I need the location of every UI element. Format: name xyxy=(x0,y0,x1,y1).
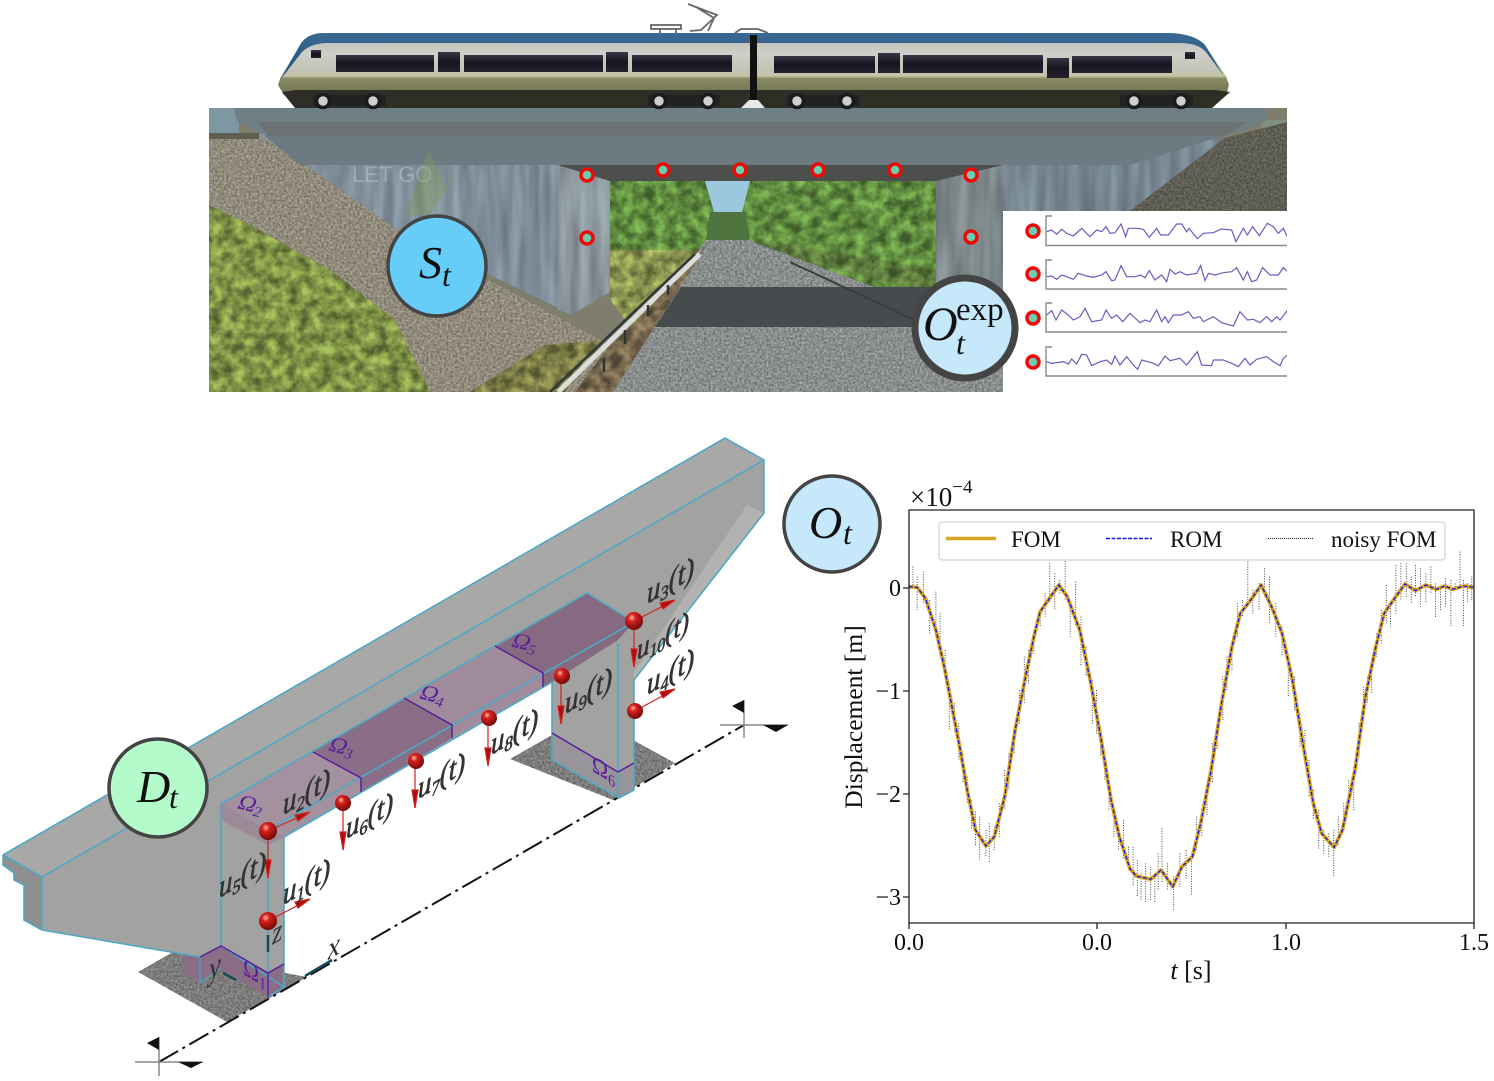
displacement labels: (t) xyxy=(665,605,689,651)
domain labels: 4 xyxy=(432,694,447,711)
y tick labels: −3 xyxy=(875,885,901,911)
badge: O_t exp: t xyxy=(956,325,966,361)
coordinate axes: x xyxy=(327,925,340,967)
FOM curve xyxy=(909,584,1474,887)
x tick labels: 1.0 xyxy=(1271,930,1301,956)
displacement labels: (t) xyxy=(513,700,538,749)
measured signals inset xyxy=(1003,211,1288,392)
legend xyxy=(939,522,1445,560)
displacement labels: (t) xyxy=(587,659,612,708)
domain labels: Ω xyxy=(243,953,259,989)
domain labels xyxy=(233,628,615,995)
displacement labels: u xyxy=(491,719,504,762)
displacement labels: u xyxy=(565,678,578,721)
section marker near xyxy=(135,1037,203,1076)
train bogies xyxy=(313,94,1193,108)
axis scale factor: ×10 xyxy=(910,482,952,512)
displacement labels: 8 xyxy=(504,731,513,757)
finite element bridge model xyxy=(3,438,788,1076)
displacement labels: u xyxy=(283,869,296,912)
y tick labels: −2 xyxy=(875,782,901,808)
pantograph xyxy=(651,4,768,34)
displacement labels: (t) xyxy=(440,744,465,793)
displacement arrows xyxy=(265,600,675,921)
end face shading xyxy=(3,855,42,930)
coordinate axes xyxy=(206,911,340,988)
displacement labels: u xyxy=(637,628,650,667)
line chart: displacement vs time xyxy=(839,477,1489,985)
signal axes xyxy=(1046,216,1287,376)
centre line xyxy=(135,700,788,1076)
badge: S_t: t xyxy=(442,257,452,293)
y tick labels xyxy=(875,576,901,911)
coordinate axes: y xyxy=(206,945,221,988)
y tick labels: −1 xyxy=(875,679,901,705)
domain labels: 3 xyxy=(341,746,356,763)
displacement labels: (t) xyxy=(368,784,393,833)
domain labels: 5 xyxy=(524,642,539,659)
train windows xyxy=(311,50,1195,78)
displacement labels: u xyxy=(219,862,232,905)
concrete body xyxy=(3,438,764,997)
train gangway xyxy=(750,35,757,100)
y axis title: Displacement [m] xyxy=(839,625,868,809)
signal traces xyxy=(1047,223,1288,369)
domain labels: Ω xyxy=(508,628,536,655)
displacement labels: (t) xyxy=(669,549,694,598)
displacement labels: u xyxy=(647,568,660,611)
sensors on bridge and inset xyxy=(581,164,1039,368)
sensor node spheres xyxy=(259,612,643,930)
legend: FOM xyxy=(1011,527,1061,552)
pier footing faces xyxy=(221,733,634,997)
displacement labels: 9 xyxy=(578,690,587,716)
train body xyxy=(278,33,1229,100)
displacement labels: u xyxy=(283,779,296,822)
domain labels: 2 xyxy=(250,804,265,821)
displacement labels: (t) xyxy=(669,640,694,689)
displacement labels: 2 xyxy=(296,791,305,817)
legend: ROM xyxy=(1170,527,1222,552)
purple girder subdomains xyxy=(221,593,634,845)
displacement labels: 7 xyxy=(431,775,441,801)
x tick labels: 1.5 xyxy=(1459,930,1489,956)
domain labels: 6 xyxy=(608,769,615,792)
displacement labels: u xyxy=(647,659,660,702)
noisy FOM trace xyxy=(909,552,1474,910)
domain labels: 1 xyxy=(259,972,266,995)
x tick labels: 0.0 xyxy=(894,930,924,956)
displacement labels: 4 xyxy=(660,671,669,697)
x axis title: t [s] xyxy=(1170,956,1212,985)
displacement labels: 3 xyxy=(660,581,669,607)
x tick labels xyxy=(894,930,1489,956)
badge: D_t xyxy=(109,739,207,837)
wing highlight xyxy=(634,505,764,680)
cyan mesh edges xyxy=(3,438,764,997)
inset background xyxy=(1003,211,1287,392)
sapling xyxy=(405,150,458,215)
badge: D_t: t xyxy=(169,779,179,815)
domain labels: Ω xyxy=(592,750,608,786)
bridge photograph with train xyxy=(209,4,1287,392)
displacement labels: 10 xyxy=(650,633,665,662)
legend: noisy FOM xyxy=(1331,527,1436,552)
train roof xyxy=(280,33,1224,80)
section marker far xyxy=(720,700,788,738)
badge: O_t exp: exp xyxy=(956,292,1004,328)
ground plate left xyxy=(138,952,307,1022)
displacement labels: u xyxy=(346,803,359,846)
axis scale factor: −4 xyxy=(952,477,973,498)
displacement labels xyxy=(219,549,694,915)
badge: S_t: S xyxy=(419,237,442,288)
domain labels: Ω xyxy=(234,790,262,817)
displacement labels: 1 xyxy=(296,882,305,907)
train xyxy=(278,4,1230,108)
displacement labels: 6 xyxy=(359,815,368,841)
domain labels: Ω xyxy=(325,732,353,759)
displacement labels: (t) xyxy=(305,760,330,809)
coordinate axes: z xyxy=(271,911,283,952)
x tick labels: 0.0 xyxy=(1082,930,1112,956)
badge: O_t exp xyxy=(915,278,1015,378)
displacement labels: (t) xyxy=(305,850,330,899)
displacement labels: 5 xyxy=(232,875,241,900)
badge: O_t exp: O xyxy=(923,298,958,351)
badge: O_t: O xyxy=(809,497,842,548)
wall graffiti: LET GO xyxy=(352,162,432,187)
left footing stub xyxy=(183,946,221,983)
badge: D_t: D xyxy=(136,761,170,812)
badge: S_t xyxy=(388,216,486,316)
plot frame and ticks xyxy=(903,510,1474,929)
displacement labels: (t) xyxy=(241,843,266,892)
y tick labels: 0 xyxy=(889,576,901,602)
ROM curve xyxy=(909,584,1474,887)
displacement labels: u xyxy=(418,763,431,806)
ground plate right xyxy=(510,735,675,800)
purple subdomain dividers xyxy=(200,646,634,997)
badge: O_t xyxy=(784,476,880,572)
domain labels: Ω xyxy=(416,680,444,707)
beam top xyxy=(3,438,764,877)
train underframe xyxy=(282,90,1230,108)
badge: O_t: t xyxy=(843,515,853,551)
photo background: embankments, wall, road and trees xyxy=(209,108,1287,392)
guard rail xyxy=(550,254,700,392)
